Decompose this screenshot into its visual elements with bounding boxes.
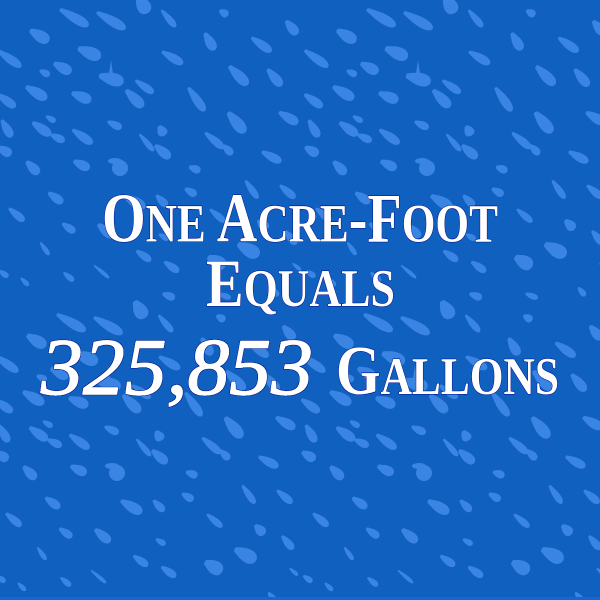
title line: Equals: EQUALS — [206, 245, 395, 321]
unit: Gallons: GALLONS — [336, 333, 559, 410]
figure: 325,853: 325,853 — [40, 324, 313, 412]
title line: One Acre-Foot: ONE ACRE-FOOT — [102, 180, 498, 258]
bottom edge strip — [0, 597, 600, 600]
